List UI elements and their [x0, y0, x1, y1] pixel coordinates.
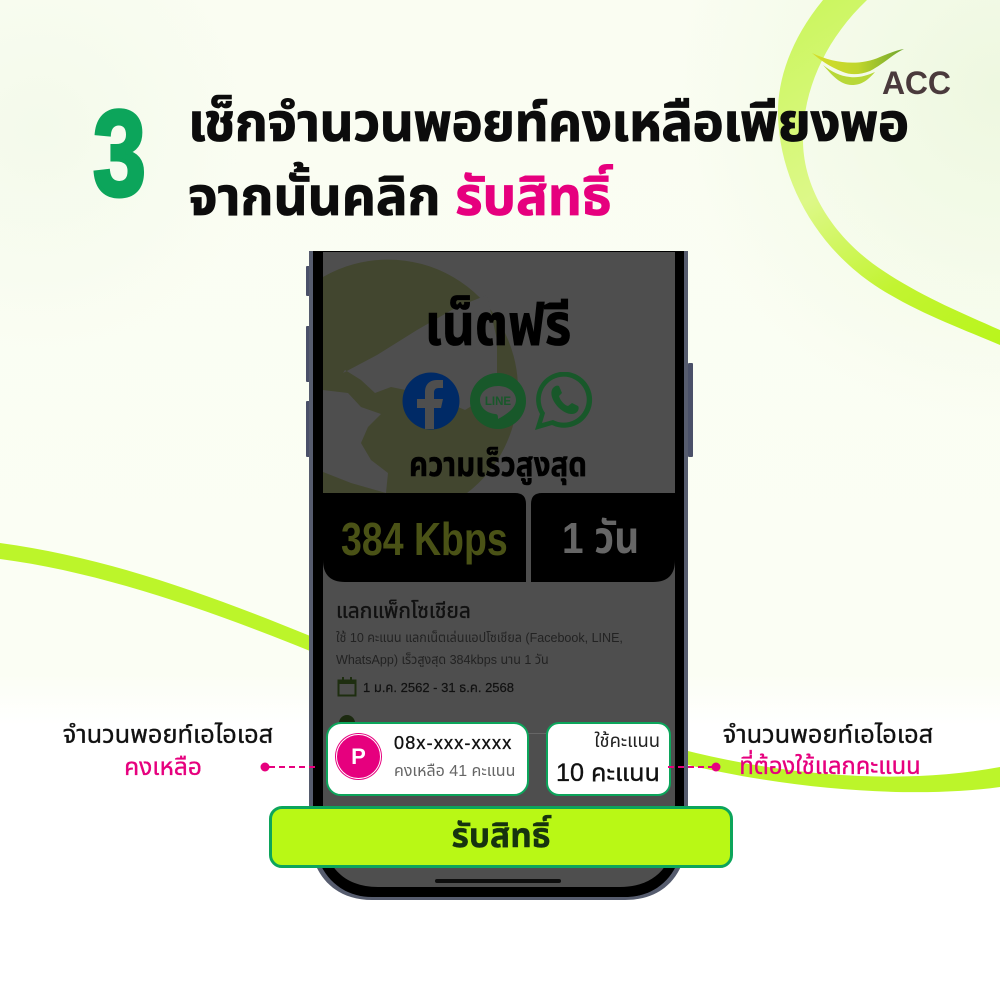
button: claim — [269, 806, 733, 868]
logo swoosh mark — [812, 49, 904, 85]
right callout label: จำนวนพอยท์เอไอเอส — [723, 721, 933, 749]
heading: free net: เน็ตฟรี — [425, 293, 571, 358]
left callout highlight: คงเหลือ — [124, 754, 202, 781]
right connector — [668, 762, 720, 772]
icon: facebook — [402, 372, 460, 430]
subheading: max speed: ความเร็วสูงสุด — [409, 446, 587, 484]
title — [188, 94, 909, 227]
stat: speed: 384 Kbps — [341, 513, 508, 565]
icon: calendar — [338, 677, 356, 696]
icon: whatsapp — [535, 372, 592, 430]
left callout label: จำนวนพอยท์เอไอเอส — [63, 721, 273, 749]
points used label: ใช้คะแนน — [594, 730, 660, 751]
stat cards — [323, 493, 526, 582]
points balance card — [326, 722, 529, 796]
step number: 3 — [93, 85, 146, 221]
icon: line — [470, 373, 526, 429]
points used card — [546, 722, 671, 796]
icon: line: LINE — [485, 396, 511, 408]
right callout — [668, 721, 933, 780]
title line 2: จากนั้นคลิก รับสิทธิ์ — [188, 168, 611, 227]
package description: ใช้ 10 คะแนน แลกเน็ตเล่นแอปโซเชียล (Facebook, LINE, — [336, 630, 623, 645]
validity dates: 1 ม.ค. 2562 - 31 ธ.ค. 2568 — [363, 680, 514, 695]
package title: แลกแพ็กโซเชียล — [336, 600, 471, 623]
package description: WhatsApp) เร็วสูงสุด 384kbps นาน 1 วัน — [336, 652, 549, 666]
globe watermark — [323, 260, 518, 493]
phone mockup — [306, 251, 693, 900]
logo wordmark: ACC — [882, 65, 951, 101]
right callout highlight: ที่ต้องใช้แลกคะแนน — [739, 754, 921, 780]
points used value: 10 คะแนน — [556, 759, 660, 787]
stat: duration: 1 วัน — [562, 514, 639, 563]
logo: ACC — [812, 49, 951, 101]
icon: points badge: P — [351, 744, 366, 769]
remaining points: คงเหลือ 41 คะแนน — [394, 763, 515, 780]
left connector — [260, 762, 315, 772]
package description — [336, 630, 623, 667]
left callout — [63, 721, 315, 781]
button: claim: รับสิทธิ์ — [451, 818, 551, 855]
phone number: 08x-xxx-xxxx — [394, 733, 512, 753]
icon: points badge — [336, 734, 381, 779]
title line 1: เช็กจำนวนพอยท์คงเหลือเพียงพอ — [188, 94, 909, 153]
phone body — [306, 251, 693, 900]
